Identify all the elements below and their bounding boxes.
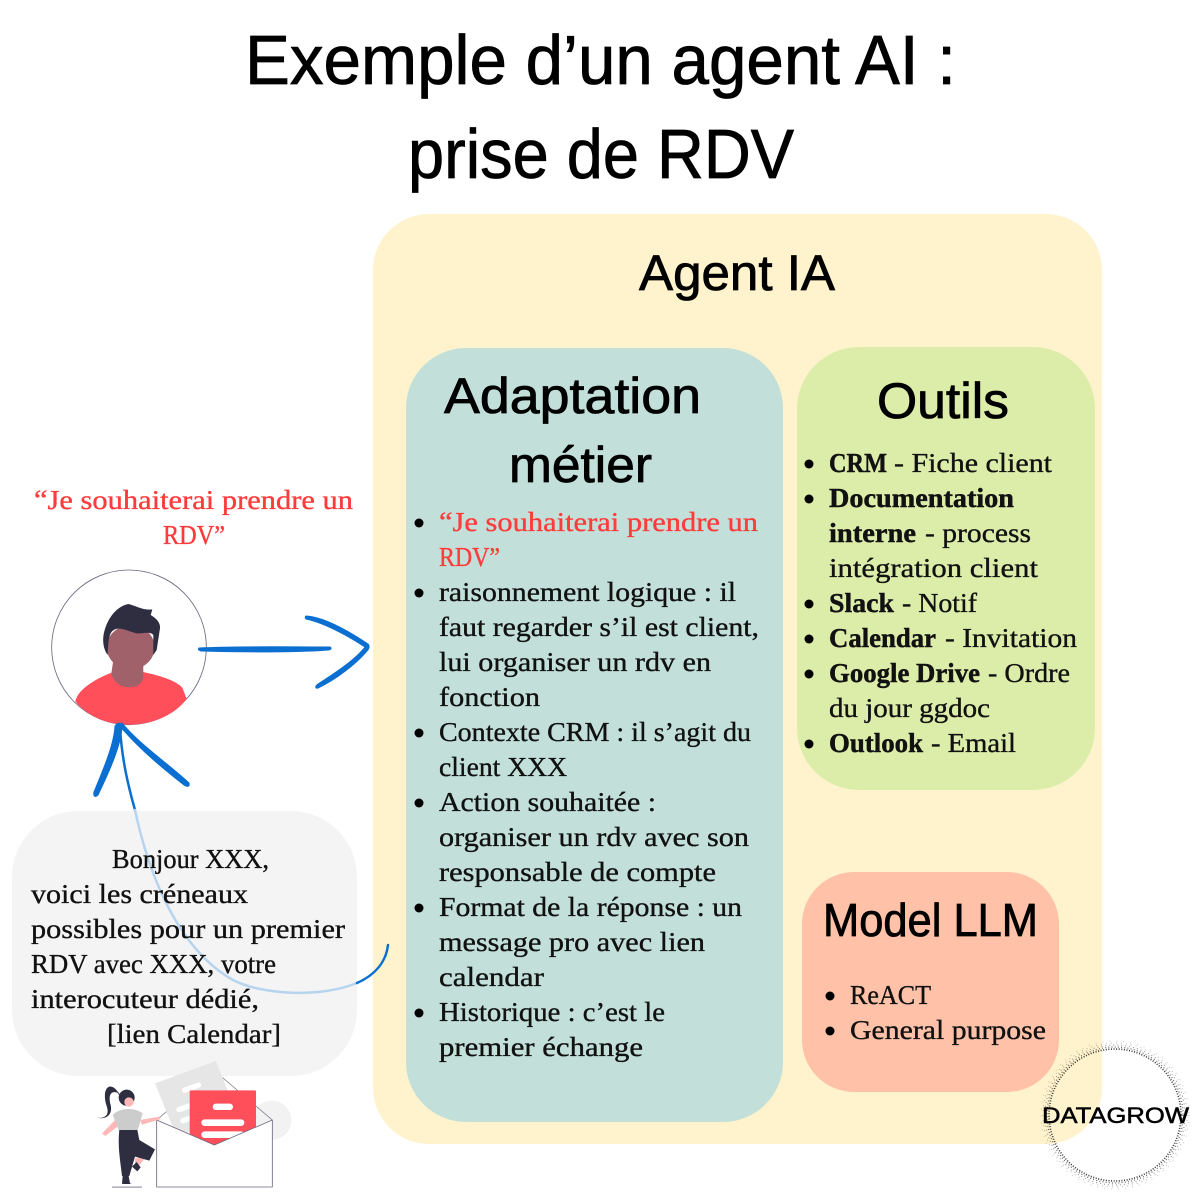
list: adaptation métier: message pro avec lien bbox=[439, 927, 706, 957]
list: adaptation métier: Action souhaitée : bbox=[439, 787, 656, 817]
logo: DATAGROW: DATAGROW bbox=[1042, 1103, 1189, 1128]
list: adaptation métier: organiser un rdv avec son bbox=[439, 822, 750, 852]
list: adaptation métier: Historique : c’est le bbox=[439, 997, 665, 1027]
list: outils: - Fiche client bbox=[894, 448, 1053, 478]
list: adaptation métier: premier échange bbox=[439, 1032, 643, 1062]
list: outils: - Notif bbox=[902, 588, 977, 618]
list: adaptation métier: raisonnement logique : il bbox=[439, 577, 736, 607]
list: adaptation métier: Contexte CRM : il s’agit du bbox=[439, 717, 752, 747]
list: outils: Slack bbox=[829, 588, 894, 618]
list: model LLM: General purpose bbox=[850, 1015, 1046, 1045]
list: outils: - Email bbox=[931, 728, 1016, 758]
list: adaptation métier: faut regarder s’il est client, bbox=[439, 612, 759, 642]
list: outils: Documentation bbox=[829, 483, 1014, 513]
heading: adaptation métier bbox=[444, 368, 701, 493]
list: outils: CRM bbox=[829, 448, 887, 478]
list: adaptation métier: fonction bbox=[439, 682, 541, 712]
list: adaptation métier bbox=[414, 507, 759, 1062]
list: adaptation métier: RDV” bbox=[439, 542, 500, 572]
reply message text: voici les créneaux bbox=[31, 879, 249, 909]
list: adaptation métier: Format de la réponse : un bbox=[439, 892, 743, 922]
heading: adaptation métier: Adaptation bbox=[444, 368, 701, 424]
list: outils: - Ordre bbox=[988, 658, 1070, 688]
list: outils bbox=[804, 448, 1078, 758]
reply message text: RDV avec XXX, votre bbox=[31, 949, 276, 979]
list: adaptation métier: client XXX bbox=[439, 752, 568, 782]
reply message text: Bonjour XXX, bbox=[112, 844, 269, 874]
reply message text: possibles pour un premier bbox=[31, 914, 345, 944]
list: adaptation métier: lui organiser un rdv en bbox=[439, 647, 712, 677]
arrow: user to agent bbox=[198, 616, 369, 688]
icon: user avatar bbox=[52, 570, 206, 725]
list: outils: intégration client bbox=[829, 553, 1039, 583]
heading: outils: Outils bbox=[877, 373, 1009, 429]
list: outils: Calendar bbox=[829, 623, 936, 653]
list: model LLM: ReACT bbox=[850, 980, 931, 1010]
list: outils: du jour ggdoc bbox=[829, 693, 990, 723]
panel: model LLM bbox=[802, 872, 1059, 1092]
icon: woman with envelope bbox=[97, 1061, 291, 1187]
reply message text bbox=[31, 844, 345, 1049]
panel: outils bbox=[797, 347, 1095, 790]
title: prise de RDV bbox=[408, 115, 794, 193]
title: Exemple d’un agent AI : bbox=[245, 21, 956, 99]
arrow: reply arrowhead bbox=[94, 723, 189, 796]
arrow: reply curve to user bbox=[120, 728, 388, 993]
list: outils: Outlook bbox=[829, 728, 923, 758]
heading: adaptation métier: métier bbox=[509, 437, 652, 493]
title bbox=[245, 21, 956, 193]
list: outils: - process bbox=[925, 518, 1031, 548]
list: adaptation métier: “Je souhaiterai prendre un bbox=[439, 507, 759, 537]
panel: reply message bubble bbox=[12, 811, 357, 1076]
list: outils: - Invitation bbox=[945, 623, 1078, 653]
list: outils: Google Drive bbox=[829, 658, 980, 688]
heading: agent IA: Agent IA bbox=[639, 245, 836, 301]
reply message text: interocuteur dédié, bbox=[31, 984, 259, 1014]
reply message text: [lien Calendar] bbox=[107, 1019, 281, 1049]
list: adaptation métier: responsable de compte bbox=[439, 857, 716, 887]
heading: model LLM: Model LLM bbox=[823, 894, 1038, 946]
user quote bbox=[34, 485, 354, 550]
logo: DATAGROW bbox=[1041, 1041, 1189, 1189]
user quote: RDV” bbox=[163, 520, 225, 550]
list: adaptation métier: calendar bbox=[439, 962, 544, 992]
list: outils: interne bbox=[829, 518, 916, 548]
list: model LLM bbox=[826, 980, 1046, 1045]
panel: adaptation métier bbox=[406, 348, 783, 1122]
user quote: “Je souhaiterai prendre un bbox=[34, 485, 354, 515]
